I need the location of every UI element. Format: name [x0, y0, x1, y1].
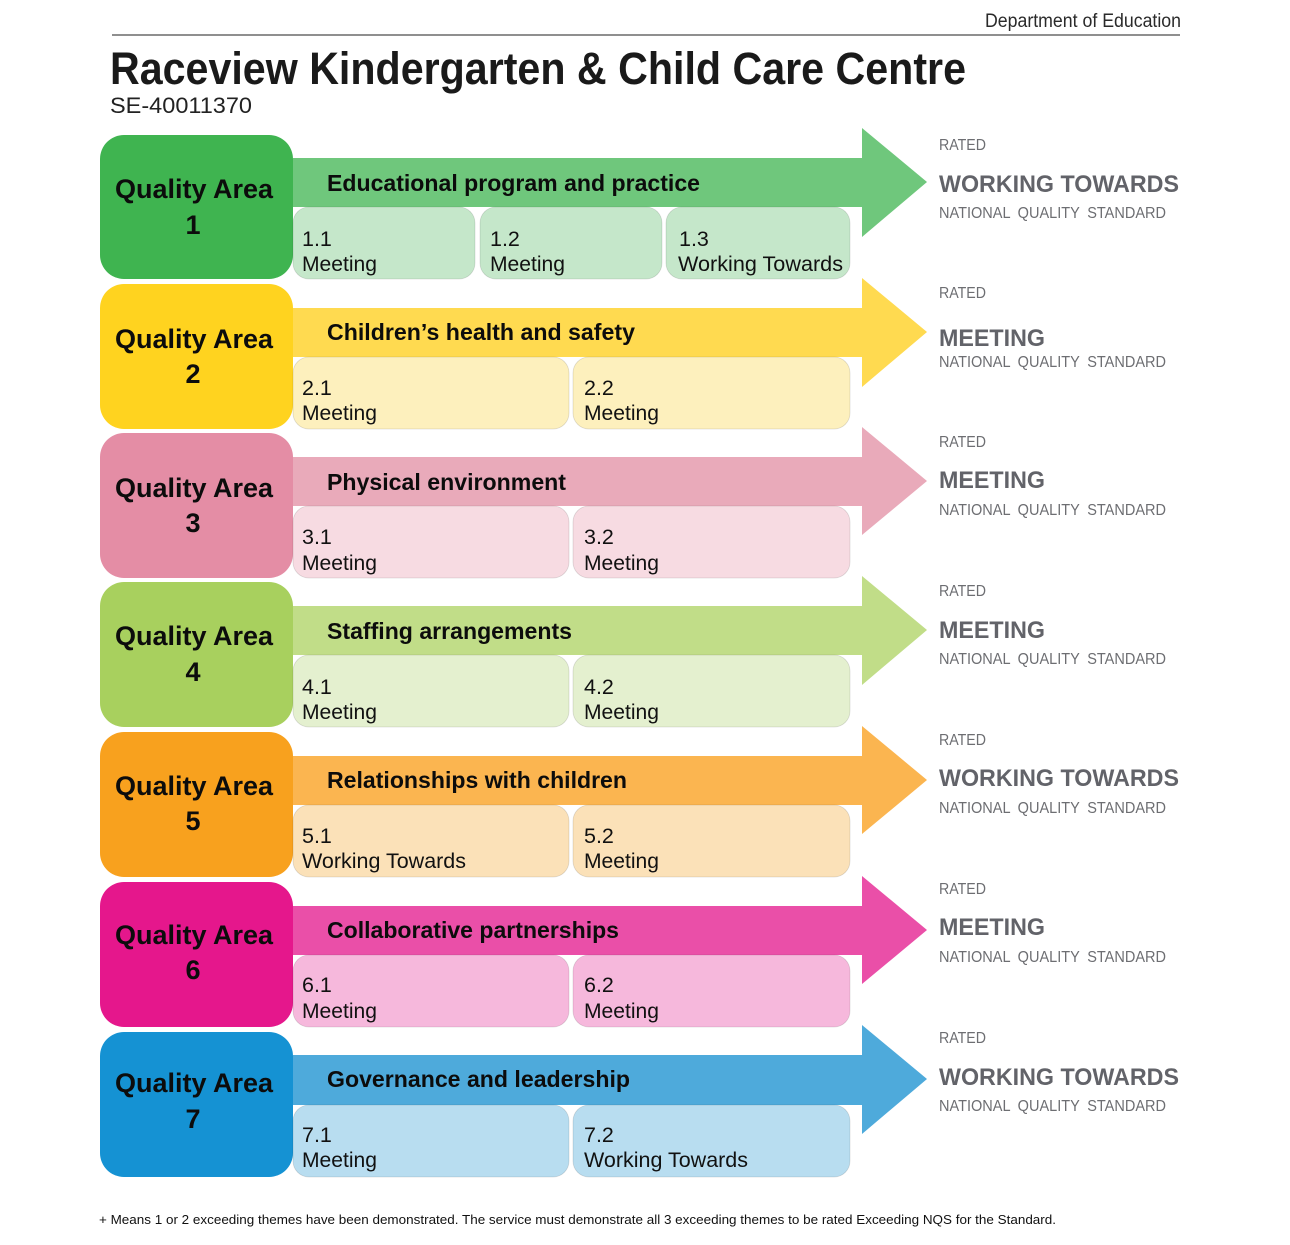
arrow 2 [293, 278, 927, 387]
heading 4: Staffing arrangements [327, 618, 572, 644]
heading 2: Children’s health and safety [327, 319, 635, 345]
heading 7: Governance and leadership [327, 1066, 630, 1092]
label 1: Quality Area [115, 174, 274, 204]
arrow 5 [293, 726, 927, 834]
panel: quality area 6 [100, 876, 1166, 1027]
box 7 [100, 1032, 293, 1177]
standard 3.1: 3.1 [302, 525, 332, 549]
number 6: 6 [185, 955, 201, 985]
panel: quality area 3 [100, 427, 1166, 578]
standard 5.1 [293, 805, 569, 877]
standard 3.1 [293, 506, 569, 578]
rating 6 [939, 881, 1166, 966]
standard 5.1: 5.1 [302, 824, 332, 848]
rating 1: NATIONAL QUALITY STANDARD [939, 205, 1166, 222]
box 4 [100, 582, 293, 727]
standard 2.1 [293, 357, 569, 429]
rating 1: WORKING TOWARDS [939, 171, 1179, 198]
arrow 6 [293, 876, 927, 984]
standard 4.1: Meeting [302, 700, 377, 724]
rating 7: RATED [939, 1030, 986, 1047]
header rule [112, 34, 1180, 36]
panel: quality area 1 [100, 128, 1179, 279]
rating 7: WORKING TOWARDS [939, 1064, 1179, 1091]
number 3: 3 [185, 508, 201, 538]
label 6: Quality Area [115, 920, 274, 950]
standard 4.2: Meeting [584, 700, 659, 724]
rating 6: MEETING [939, 914, 1045, 941]
rating 2 [939, 285, 1166, 371]
arrow 7 [293, 1025, 927, 1134]
standard 4.1 [293, 655, 569, 727]
title: Raceview Kindergarten & Child Care Centre [110, 43, 966, 94]
department label: Department of Education [985, 11, 1181, 32]
rating 5 [939, 732, 1179, 817]
standard 1.2 [480, 207, 662, 279]
rating 6: RATED [939, 881, 986, 898]
number 4: 4 [185, 657, 201, 687]
rating 3: MEETING [939, 467, 1045, 494]
standard 7.1 [293, 1105, 569, 1177]
standard 2.2: 2.2 [584, 376, 614, 400]
standard 1.3: Working Towards [678, 252, 843, 276]
number 7: 7 [185, 1104, 201, 1134]
rating 4: MEETING [939, 617, 1045, 644]
standard 3.1: Meeting [302, 551, 377, 575]
label 5: Quality Area [115, 771, 274, 801]
rating 3: NATIONAL QUALITY STANDARD [939, 502, 1166, 519]
standard 2.2: Meeting [584, 401, 659, 425]
label 3: Quality Area [115, 473, 274, 503]
rating 2: NATIONAL QUALITY STANDARD [939, 354, 1166, 371]
rating 6: NATIONAL QUALITY STANDARD [939, 949, 1166, 966]
arrow 4 [293, 576, 927, 685]
standard 1.3 [666, 207, 850, 279]
rating 4: NATIONAL QUALITY STANDARD [939, 651, 1166, 668]
rating 5: NATIONAL QUALITY STANDARD [939, 800, 1166, 817]
standard 5.2 [573, 805, 850, 877]
standard 5.2: 5.2 [584, 824, 614, 848]
standard 2.1: 2.1 [302, 376, 332, 400]
rating 3: RATED [939, 434, 986, 451]
rating 4 [939, 583, 1166, 668]
standard 7.2: 7.2 [584, 1123, 614, 1147]
footnote: + Means 1 or 2 exceeding themes have been demonstrated. The service must demonstrate all 3 exceeding themes to be rated Exceeding NQS for the Standard. [99, 1213, 1056, 1227]
rating 2: RATED [939, 285, 986, 302]
standard 3.2 [573, 506, 850, 578]
panel: quality area 2 [100, 278, 1166, 429]
standard 4.2: 4.2 [584, 675, 614, 699]
standard 1.1: Meeting [302, 252, 377, 276]
standard 6.1 [293, 955, 569, 1027]
standard 4.1: 4.1 [302, 675, 332, 699]
standard 7.1: Meeting [302, 1148, 377, 1172]
standard 6.2: 6.2 [584, 973, 614, 997]
box 2 [100, 284, 293, 429]
standard 7.2 [573, 1105, 850, 1177]
rating 7: NATIONAL QUALITY STANDARD [939, 1098, 1166, 1115]
standard 6.1: Meeting [302, 999, 377, 1023]
standard 5.1: Working Towards [302, 849, 466, 873]
label 4: Quality Area [115, 621, 274, 651]
standard 7.1: 7.1 [302, 1123, 332, 1147]
box 6 [100, 882, 293, 1027]
standard 3.2: Meeting [584, 551, 659, 575]
arrow 1 [293, 128, 927, 237]
box 5 [100, 732, 293, 877]
standard 7.2: Working Towards [584, 1148, 748, 1172]
panel: quality area 5 [100, 726, 1179, 877]
arrow 3 [293, 427, 927, 535]
standard 1.3: 1.3 [679, 227, 709, 251]
service id: SE-40011370 [110, 93, 252, 118]
number 2: 2 [185, 359, 201, 389]
standard 6.2: Meeting [584, 999, 659, 1023]
panel: quality area 4 [100, 576, 1166, 727]
box 1 [100, 135, 293, 279]
standard 5.2: Meeting [584, 849, 659, 873]
label 2: Quality Area [115, 324, 274, 354]
standard 4.2 [573, 655, 850, 727]
standard 6.1: 6.1 [302, 973, 332, 997]
standard 6.2 [573, 955, 850, 1027]
rating 2: MEETING [939, 325, 1045, 352]
box 3 [100, 433, 293, 578]
rating 1: RATED [939, 137, 986, 154]
heading 1: Educational program and practice [327, 170, 700, 196]
number 5: 5 [185, 806, 201, 836]
standard 1.2: 1.2 [490, 227, 520, 251]
rating 7 [939, 1030, 1179, 1115]
rating 5: RATED [939, 732, 986, 749]
number 1: 1 [185, 210, 201, 240]
standard 2.2 [573, 357, 850, 429]
standard 2.1: Meeting [302, 401, 377, 425]
heading 5: Relationships with children [327, 767, 627, 793]
rating 5: WORKING TOWARDS [939, 765, 1179, 792]
heading 6: Collaborative partnerships [327, 917, 619, 943]
standard 3.2: 3.2 [584, 525, 614, 549]
panel: quality area 7 [100, 1025, 1179, 1177]
rating 3 [939, 434, 1166, 519]
standard 1.2: Meeting [490, 252, 565, 276]
rating 4: RATED [939, 583, 986, 600]
rating 1 [939, 137, 1179, 222]
standard 1.1 [293, 207, 475, 279]
heading 3: Physical environment [327, 469, 566, 495]
standard 1.1: 1.1 [302, 227, 332, 251]
label 7: Quality Area [115, 1068, 274, 1098]
